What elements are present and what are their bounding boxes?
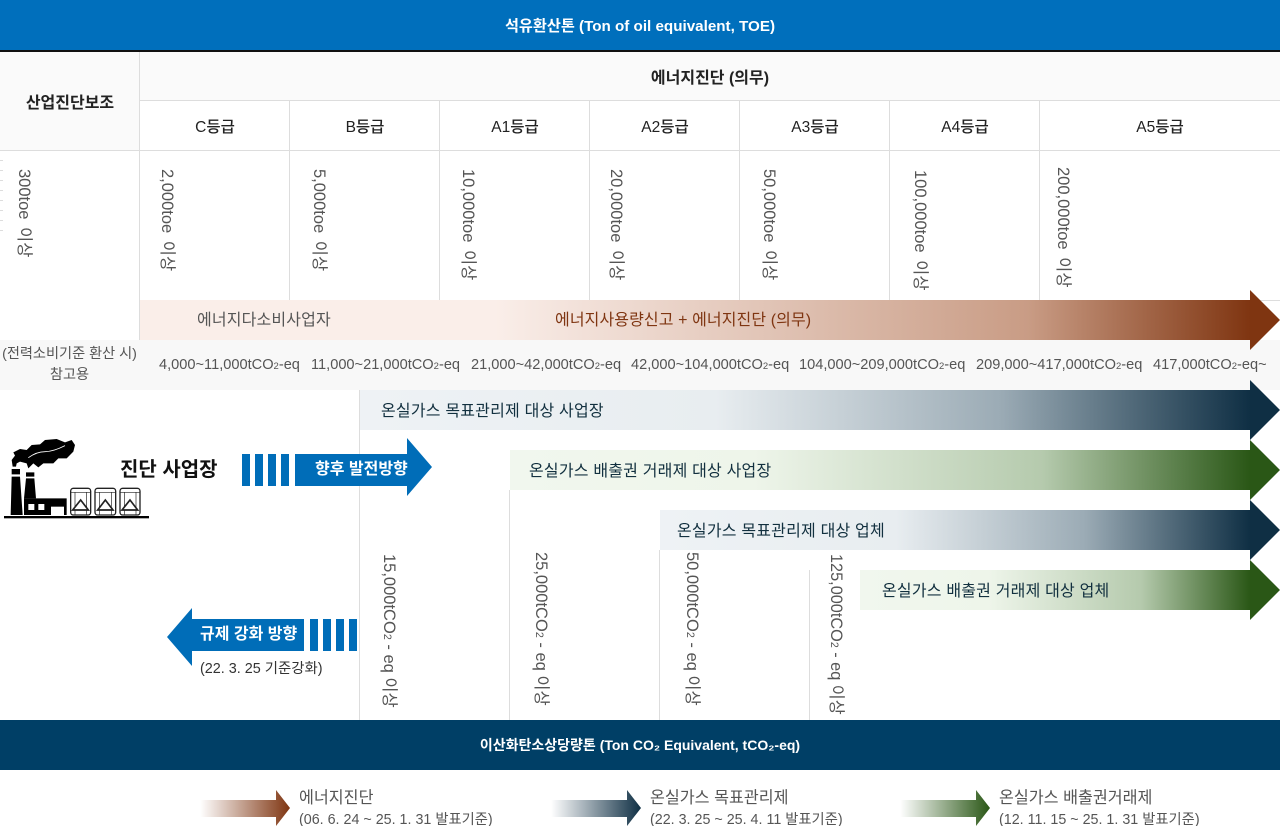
label: target management sites: 온실가스 목표관리제 대상 사업장 [381,403,604,420]
legend arrow: brown [203,790,290,826]
label: 에너지다소비사업자: 에너지다소비사업자 [197,312,331,329]
header: B등급 [289,101,440,151]
label: 규제 강화 방향: 규제 강화 방향 [200,626,297,643]
note: 기준강화 date: (22. 3. 25 기준강화) [200,661,323,677]
legend arrow: navy [554,790,641,826]
legend text: emissions trading: 온실가스 배출권거래제 [999,789,1152,807]
header: A2등급: A2등급 [641,118,689,136]
legend text: energy diagnosis [299,789,493,826]
header: 에너지진단 [139,52,1280,101]
threshold: 125,000tCO2: 125,000tCO 2 - eq 이상 [827,554,845,715]
threshold: 5,000toe: 5,000toe 이상 [310,169,328,271]
threshold: 25,000tCO2: 25,000tCO 2 - eq 이상 [532,552,550,706]
arrow: GHG target management sites [360,380,1280,440]
header: C등급 [139,101,290,151]
value: A1등급 CO2: 21,000~42,000tCO2-eq [471,357,621,373]
threshold: 15,000tCO2: 15,000tCO 2 - eq 이상 [380,554,398,708]
arrow: emissions trading sites [510,440,1280,500]
header: A5등급: A5등급 [1136,118,1184,136]
reference row: power consumption conversion [0,340,1280,390]
reference row label: 참고용 [50,367,89,383]
header: A4등급 [889,101,1040,151]
label: emissions trading sites: 온실가스 배출권 거래제 대상 사업장 [529,463,771,480]
reference row label [2,346,137,383]
threshold: 200,000toe: 200,000toe 이상 [1054,167,1072,288]
footer bar: tCO2-eq: 이산화탄소상당량톤 (Ton CO₂ Equivalent, tCO₂-eq) [480,737,800,753]
threshold: 10,000toe: 10,000toe 이상 [459,169,477,280]
header: 산업진단보조 [0,52,140,151]
footer bar: tCO2-eq [0,720,1280,770]
arrow: emissions trading companies [860,560,1280,620]
value: B등급 CO2: 11,000~21,000tCO2-eq [311,357,460,373]
header: A2등급 [589,101,740,151]
legend text: energy diagnosis: 에너지진단 [299,789,373,807]
header: A1등급 [439,101,590,151]
label: emissions trading companies: 온실가스 배출권 거래제 대상 업체 [882,583,1109,600]
threshold: 50,000toe: 50,000toe 이상 [760,169,778,280]
threshold: 100,000toe: 100,000toe 이상 [911,170,929,291]
value: A4등급 CO2: 209,000~417,000tCO2-eq [976,357,1142,373]
value: A5등급 CO2: 417,000tCO2-eq~ [1153,357,1267,373]
label: target management companies: 온실가스 목표관리제 대상 업체 [677,523,885,540]
legend text: emissions trading [999,789,1200,826]
header: A4등급: A4등급 [941,118,989,136]
icon: factory with drums [4,439,149,518]
arrow: target management companies [660,500,1280,560]
title: TOE header bar: 석유환산톤 (Ton of oil equivalent, TOE) [505,18,775,35]
header: A1등급: A1등급 [491,118,539,136]
header: A3등급: A3등급 [791,118,839,136]
threshold: 2,000toe: 2,000toe 이상 [158,169,176,271]
reference row label: (전력소비기준 환산 시) [2,346,137,362]
header: A5등급 [1039,101,1280,151]
header: 산업진단보조: 산업진단보조 [26,95,114,112]
threshold: 300toe: 300toe 이상 [15,169,33,257]
threshold: 50,000tCO2: 50,000tCO 2 - eq 이상 [683,552,701,706]
header: C등급: C등급 [195,118,235,136]
title: TOE header bar [0,0,1280,52]
header: 에너지진단: 에너지진단 (의무) [651,70,769,87]
label: 에너지사용량신고: 에너지사용량신고 + 에너지진단 (의무) [555,312,811,329]
legend text: target management: 온실가스 목표관리제 [650,789,789,807]
arrow: stronger regulation [167,608,357,666]
threshold: 20,000toe: 20,000toe 이상 [607,169,625,280]
value: A3등급 CO2: 104,000~209,000tCO2-eq [799,357,965,373]
arrow: energy diagnosis obligation [140,290,1280,350]
label: 향후 발전방향: 향후 발전방향 [315,461,408,478]
value: A2등급 CO2: 42,000~104,000tCO2-eq [631,357,789,373]
legend arrow: green [903,790,990,826]
header: A3등급 [739,101,890,151]
legend: energy diagnosis [203,789,493,826]
legend: emissions trading [903,789,1200,826]
legend text: target management [650,789,843,826]
label: 진단 사업장: 진단 사업장 [120,459,218,481]
header: B등급: B등급 [346,118,384,136]
value: C등급 CO2: 4,000~11,000tCO2-eq [159,357,300,373]
legend: target management [554,789,843,826]
arrow: future direction [242,438,432,496]
